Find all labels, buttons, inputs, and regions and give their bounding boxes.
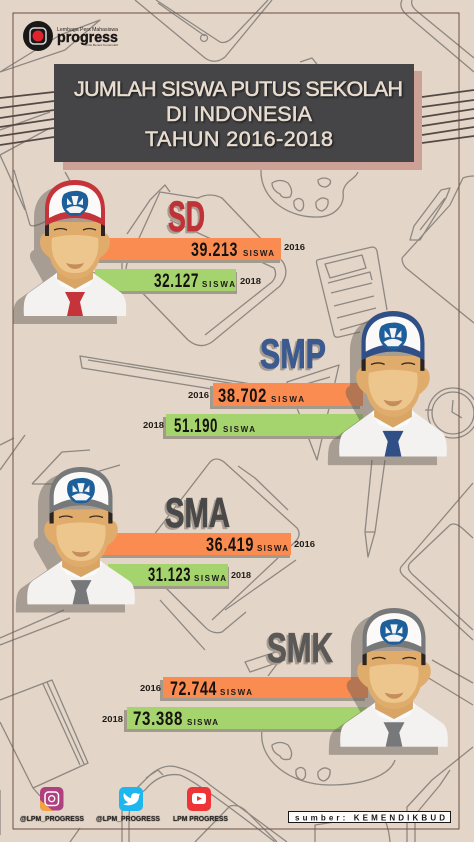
- SD heading: SD: [168, 193, 205, 241]
- social footer: [20, 787, 228, 823]
- SMA 2018 bar: SISWA: [194, 574, 226, 583]
- title shadow panel: [63, 71, 422, 170]
- SMK 2016 bar: [140, 677, 368, 701]
- SMP 2016 bar: [188, 383, 363, 409]
- title panel: [54, 64, 414, 162]
- SMA student: [16, 467, 135, 612]
- SMK 2016 bar: 72.744: [170, 679, 217, 700]
- SMP 2018 bar: 51.190: [174, 416, 218, 437]
- SD 2016 bar: 2016: [284, 242, 305, 252]
- SD 2018 bar: [92, 269, 261, 294]
- SMP 2016 bar: 2016: [188, 390, 209, 400]
- SD 2016 bar: 39.213: [191, 240, 238, 261]
- SMP 2018 bar: [143, 414, 363, 439]
- panel: SMP: [143, 311, 447, 465]
- SMK 2018 bar: SISWA: [187, 718, 218, 727]
- SD 2018 bar: 2018: [240, 276, 261, 286]
- title: TAHUN 2016-2018: [145, 127, 333, 151]
- icon: youtube: [187, 787, 211, 811]
- SD 2018 bar: SISWA: [202, 280, 235, 289]
- wordmark: progress: [57, 29, 118, 46]
- SMK 2016 bar: 2016: [140, 683, 161, 693]
- SMK 2016 bar: SISWA: [220, 688, 252, 697]
- icon: twitter: [119, 787, 143, 811]
- title: [74, 77, 403, 151]
- SMK 2018 bar: 73.388: [133, 709, 183, 730]
- title: DI INDONESIA: [166, 102, 313, 126]
- stripes: [0, 90, 474, 145]
- SD 2016 bar: SISWA: [243, 249, 274, 258]
- SMP 2016 bar: SISWA: [271, 395, 304, 404]
- organisation name: Lembaga Pers Mahasiswa: [57, 27, 119, 33]
- logo mark: [23, 21, 53, 51]
- SMA heading: SMA: [165, 489, 230, 536]
- social handles: @LPM_PROGRESS: [96, 814, 160, 823]
- source note: sumber: KEMENDIKBUD: [295, 814, 445, 822]
- SMP 2018 bar: SISWA: [223, 425, 255, 434]
- tagline: Kritis Berani Konstruktif: [85, 43, 118, 47]
- panel: SMK: [102, 608, 448, 755]
- panel: SD: [13, 180, 305, 324]
- SMP student: [328, 311, 447, 465]
- SMA 2018 bar: 2018: [231, 570, 251, 580]
- SMA 2018 bar: [105, 564, 251, 589]
- SD 2016 bar: [97, 238, 305, 263]
- social handles: [20, 814, 228, 823]
- SMA 2016 bar: 36.419: [206, 535, 254, 556]
- SMA 2018 bar: 31.123: [148, 565, 191, 586]
- SMA 2016 bar: SISWA: [257, 544, 288, 553]
- SMP 2016 bar: 38.702: [218, 386, 267, 407]
- social handles: @LPM_PROGRESS: [20, 814, 84, 823]
- SMK 2018 bar: [102, 707, 367, 732]
- SD student: [13, 180, 126, 324]
- icon: instagram: [40, 787, 64, 811]
- SMP 2018 bar: 2018: [143, 420, 164, 430]
- SD 2018 bar: 32.127: [154, 271, 199, 292]
- title block: [54, 64, 422, 170]
- panel: SMA: [16, 467, 315, 612]
- SMA 2016 bar: [97, 533, 315, 558]
- logo: [23, 21, 119, 51]
- SMK heading: SMK: [267, 624, 333, 671]
- title: JUMLAH SISWA PUTUS SEKOLAH: [74, 77, 403, 101]
- SMP heading: SMP: [260, 330, 326, 377]
- SMK student: [329, 608, 448, 755]
- SMK 2018 bar: 2018: [102, 714, 123, 724]
- SMA 2016 bar: 2016: [294, 539, 315, 549]
- social handles: LPM PROGRESS: [173, 814, 228, 823]
